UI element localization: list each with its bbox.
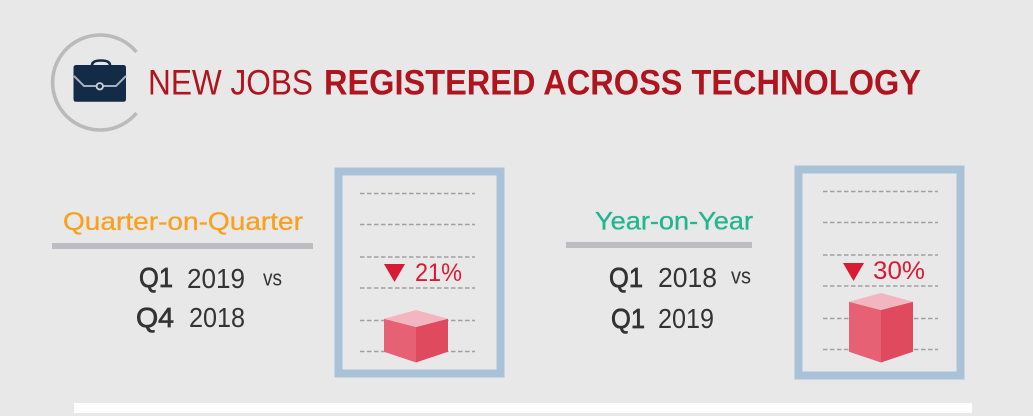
value: 21% decline: 21% <box>415 259 462 287</box>
icon: briefcase in open ring <box>53 35 136 130</box>
panel frame <box>798 170 960 376</box>
comparison periods: Q1 <box>609 262 643 293</box>
cube bar <box>849 293 913 362</box>
comparison periods: Q1 <box>611 303 645 334</box>
section: year-on-year <box>566 207 753 334</box>
heading: year-on-year: Year-on-Year <box>595 207 753 235</box>
comparison periods: vs <box>731 264 751 288</box>
grid lines <box>823 192 938 350</box>
title: NEW JOBS <box>148 64 313 102</box>
comparison periods: 2019 <box>187 263 245 294</box>
panel: quarter-on-quarter chart <box>338 172 500 374</box>
panel frame <box>338 172 500 374</box>
comparison periods: 2018 <box>189 302 245 333</box>
section: quarter-on-quarter <box>52 208 313 333</box>
heading: quarter-on-quarter: Quarter-on-Quarter <box>63 208 303 236</box>
comparison periods: vs <box>263 266 282 290</box>
title bold part: REGISTERED ACROSS TECHNOLOGY <box>324 64 921 102</box>
cube bar <box>384 310 448 362</box>
heading underline <box>566 242 752 248</box>
comparison periods: 2018 <box>658 262 717 293</box>
comparison periods <box>609 262 751 334</box>
icon: down triangle <box>384 264 405 282</box>
panel: year-on-year chart <box>798 170 960 376</box>
comparison periods: Q1 <box>139 262 173 293</box>
bottom white bar <box>74 403 972 413</box>
grid lines <box>360 194 475 352</box>
comparison periods: Q4 <box>136 302 174 333</box>
heading underline <box>52 243 313 249</box>
comparison periods: 2019 <box>658 303 714 334</box>
header <box>53 35 921 130</box>
value: 30% decline: 30% <box>873 257 925 285</box>
icon: down triangle <box>843 263 864 281</box>
comparison periods <box>136 262 282 333</box>
